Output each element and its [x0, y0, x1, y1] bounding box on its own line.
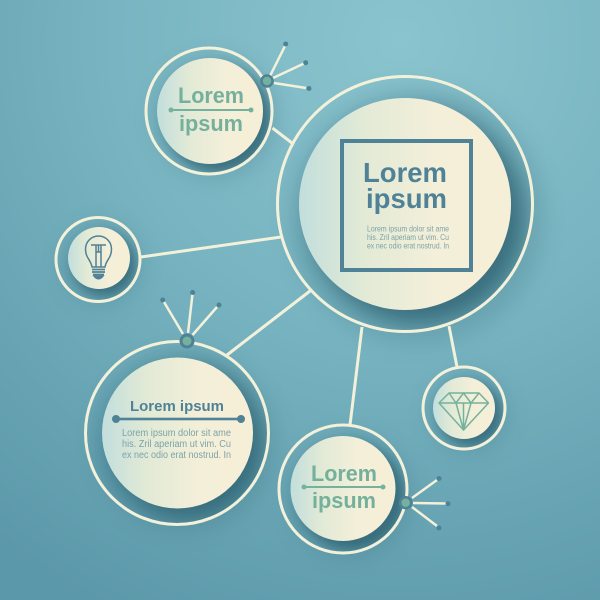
heading: bottom-left circle: Lorem ipsum — [130, 398, 224, 415]
body text: main circle — [367, 224, 449, 250]
heading second line: bottom circle: ipsum — [312, 488, 376, 513]
panel: bottom-left circle — [86, 290, 268, 524]
heading: top circle: Lorem — [178, 83, 244, 108]
body text: main circle: Lorem ipsum dolor sit ame — [367, 224, 449, 234]
body text: bottom-left circle — [122, 428, 231, 461]
body text: main circle: his. Zril aperiam ut vim. Cu — [367, 232, 449, 242]
body text: bottom-left circle: ex nec odio erat nostrud. In — [122, 450, 231, 461]
spokes: bottom circle — [400, 476, 450, 530]
connector lines — [141, 128, 457, 425]
spokes: top circle — [262, 42, 312, 91]
body text: bottom-left circle: Lorem ipsum dolor sit ame — [122, 428, 231, 439]
panel: bottom circle — [279, 425, 450, 553]
panel: main circle — [278, 76, 532, 332]
heading: main circle: Lorem — [363, 157, 447, 188]
divider with dots: bottom circle — [302, 484, 386, 490]
heading second line: main circle: ipsum — [366, 183, 447, 214]
icon: light bulb — [86, 236, 112, 279]
heading second line: top circle: ipsum — [179, 111, 243, 136]
spokes: bottom-left circle — [160, 290, 222, 347]
divider with dots: bottom-left circle — [112, 415, 245, 423]
panel: bulb circle — [56, 218, 140, 302]
body text: main circle: ex nec odio erat nostrud. In — [367, 240, 449, 250]
icon: diamond — [439, 393, 488, 430]
frame: main circle square — [342, 141, 471, 270]
ring outer shadows — [61, 56, 545, 558]
divider with dots: top circle — [168, 108, 254, 112]
panel: top circle — [146, 42, 312, 174]
body text: bottom-left circle: his. Zril aperiam ut vim. Cu — [122, 439, 231, 450]
panel: diamond circle — [423, 367, 505, 449]
heading: bottom circle: Lorem — [311, 461, 377, 486]
